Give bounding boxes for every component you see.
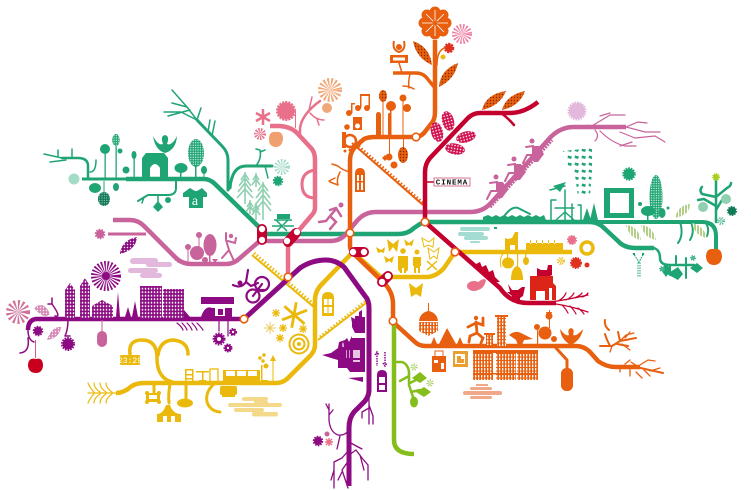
picnic table — [272, 214, 294, 231]
right tree — [698, 180, 731, 222]
runner — [319, 202, 344, 229]
yellow furniture and clock: 23:29 — [118, 357, 142, 366]
person on box — [390, 41, 408, 63]
orange lower decorations — [419, 303, 583, 391]
purple left decorations — [12, 268, 236, 373]
pale green forest — [237, 172, 271, 220]
green left decorations — [68, 134, 207, 212]
red animals — [467, 262, 556, 300]
yellow staircase links — [252, 253, 366, 340]
fence — [526, 240, 563, 250]
station markers — [240, 133, 459, 325]
escalator people — [487, 138, 544, 199]
interchange: east pair — [382, 276, 388, 282]
capsule — [561, 368, 573, 391]
dome — [419, 303, 438, 321]
big flower — [418, 6, 452, 40]
yellow window — [322, 292, 334, 316]
green line and branches — [44, 90, 716, 278]
icon: t-shirt — [183, 188, 207, 208]
crimson leaves — [429, 91, 525, 156]
rose and red dots — [568, 236, 590, 268]
green right decorations — [483, 168, 736, 280]
pale burst and scallop — [274, 163, 286, 185]
crimson line — [425, 102, 588, 314]
window frame — [604, 188, 634, 218]
rose decorations — [256, 84, 336, 147]
trees — [185, 232, 218, 263]
cinema sign: CINEMA — [436, 180, 468, 188]
orange line — [329, 40, 663, 378]
mauve line — [108, 113, 665, 264]
orange upper decorations — [342, 6, 467, 192]
interchange: centre pair — [349, 247, 369, 257]
mauve pale flower — [569, 103, 585, 119]
facades — [473, 350, 493, 380]
apple orange — [706, 249, 722, 265]
interchange: west pair — [257, 224, 267, 245]
music notes — [342, 94, 370, 152]
trees above line — [376, 90, 411, 168]
butterflies and couple — [376, 238, 439, 297]
icon: yellow dog — [505, 232, 518, 250]
cyclist — [233, 270, 269, 302]
icon: tulip above arch — [153, 135, 177, 153]
lime line — [394, 322, 420, 454]
green dot pattern — [563, 148, 592, 197]
bag — [432, 356, 446, 372]
icon: arch — [142, 153, 168, 177]
interchange: rose pair — [288, 233, 296, 242]
purple line — [20, 260, 373, 488]
cathedral — [322, 310, 365, 382]
pale yellow cloud — [228, 397, 282, 416]
runner — [468, 316, 483, 343]
dancer — [222, 233, 236, 261]
lime decorations — [410, 365, 432, 408]
yellow line — [88, 252, 572, 412]
rose line — [270, 97, 324, 277]
picture — [453, 351, 468, 367]
teal cloud — [458, 227, 497, 243]
bottom dots — [314, 432, 333, 446]
salmon cloud — [463, 384, 502, 399]
mauve decorations — [96, 230, 236, 278]
yellow asterisks and target — [264, 300, 308, 354]
t-shirt letter: a — [192, 194, 199, 209]
purple window and arrows — [375, 352, 387, 392]
yellow upper right decorations — [500, 232, 593, 280]
lower right fruits — [661, 263, 671, 277]
cloud — [128, 258, 172, 278]
yellow furniture and clock — [118, 353, 276, 422]
orange window — [355, 168, 365, 192]
